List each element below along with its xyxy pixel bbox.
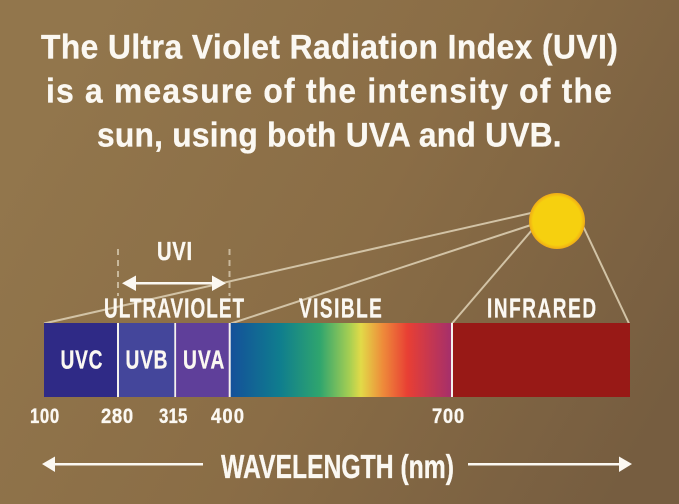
icon: sun xyxy=(529,193,585,249)
UVI double arrow xyxy=(122,276,226,291)
wavelength tick values: 280 xyxy=(101,405,133,428)
right arrow xyxy=(468,456,632,472)
segment dividers xyxy=(117,323,453,397)
band headings: INFRARED xyxy=(487,294,596,324)
dashed range bounds xyxy=(118,249,230,296)
segment: UVC xyxy=(44,323,118,397)
band headings: ULTRAVIOLET xyxy=(104,294,245,324)
wavelength tick values xyxy=(30,405,464,429)
segment labels: UVA xyxy=(183,346,224,374)
segment labels xyxy=(60,346,224,374)
wavelength tick values: 100 xyxy=(30,405,59,429)
title xyxy=(41,28,618,155)
segment labels: UVB xyxy=(126,346,168,374)
segment: UVB xyxy=(118,323,175,397)
segment: infrared xyxy=(452,323,630,397)
left arrow xyxy=(42,456,203,472)
title: sun, using both UVA and UVB. xyxy=(97,116,562,155)
axis title: WAVELENGTH (nm) xyxy=(221,448,454,485)
title: The Ultra Violet Radiation Index (UVI) xyxy=(41,28,618,67)
segment: visible gradient xyxy=(230,323,452,397)
wavelength tick values: 400 xyxy=(211,405,244,428)
wavelength axis xyxy=(42,448,632,485)
UVI label: UVI xyxy=(157,237,192,266)
wavelength tick values: 700 xyxy=(432,405,464,428)
segment labels: UVC xyxy=(60,346,103,374)
wavelength tick values: 315 xyxy=(159,405,188,429)
UVI range marker xyxy=(118,237,230,296)
title: is a measure of the intensity of the xyxy=(46,72,612,111)
spectrum bar xyxy=(44,323,630,397)
band headings: VISIBLE xyxy=(299,294,382,324)
segment: UVA xyxy=(175,323,230,397)
band headings xyxy=(104,294,596,324)
sun rays xyxy=(44,213,629,324)
